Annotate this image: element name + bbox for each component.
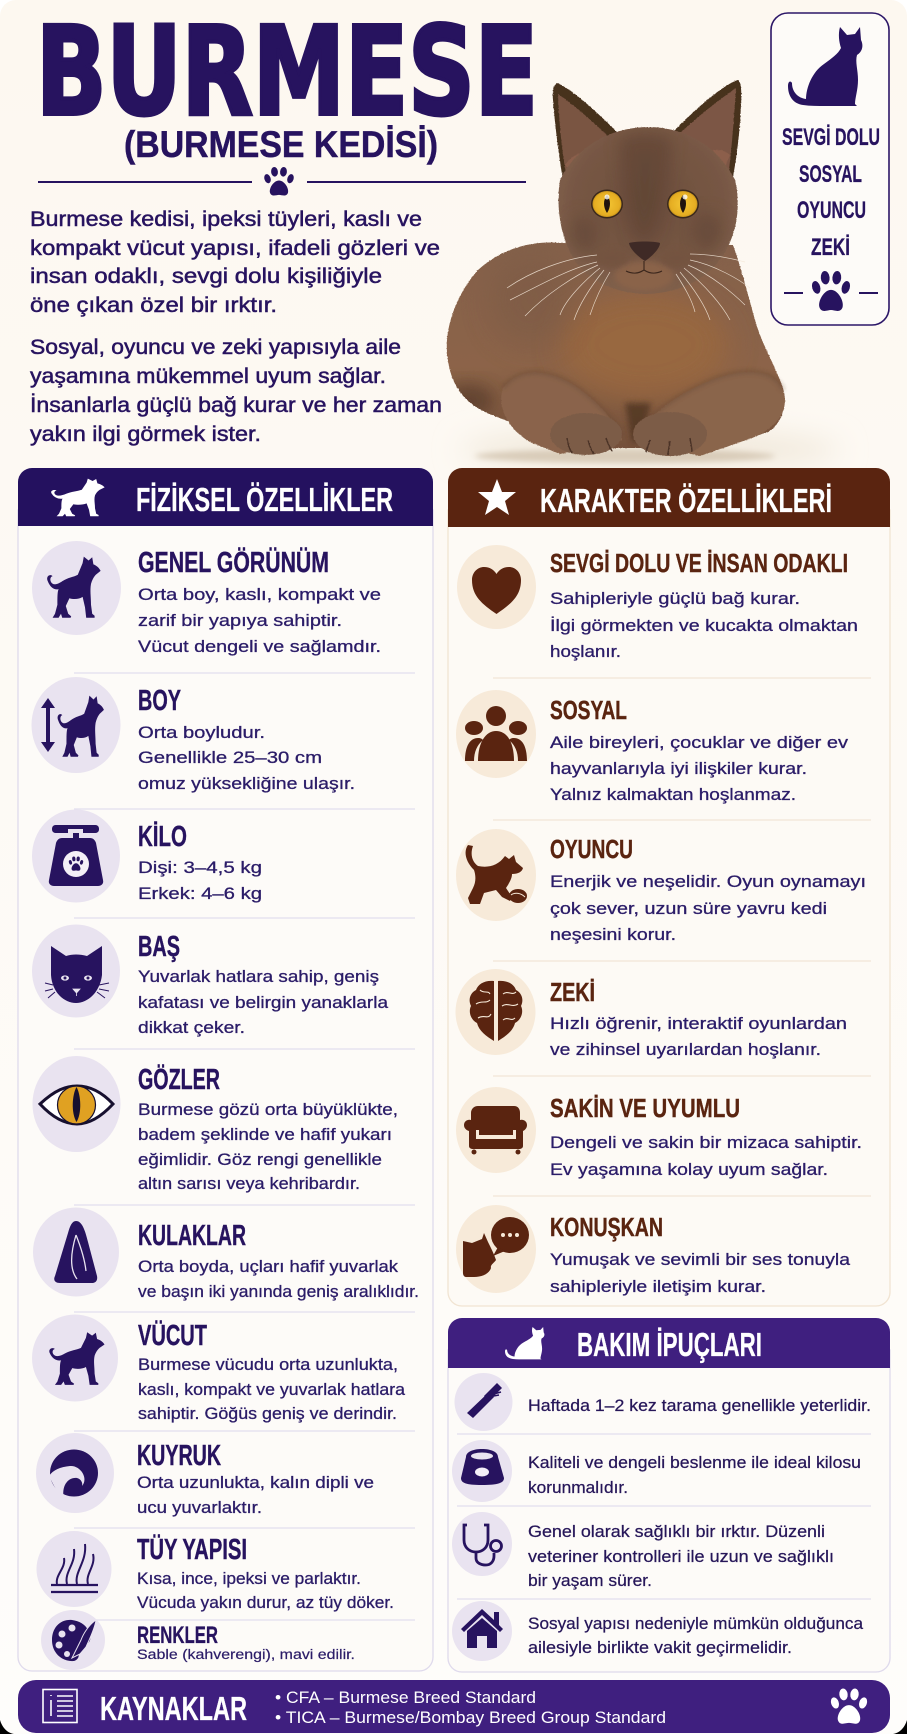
footer: sources: KAYNAKLAR (100, 1690, 247, 1727)
tip: comb (454, 1373, 871, 1431)
item: kuyruk: ucu yuvarlaktır. (137, 1499, 262, 1517)
item: kulaklar (33, 1208, 419, 1301)
item: kilo: KİLO (138, 821, 187, 853)
item: renkler (41, 1610, 355, 1670)
item: konuşkan (456, 1205, 851, 1296)
item: oyuncu: Enerjik ve neşelidir. Oyun oynamayı (550, 873, 866, 891)
footer: sources (18, 1680, 890, 1733)
item: sosyal: hayvanlarıyla iyi ilişkiler kurar. (550, 760, 807, 778)
panel header (448, 1318, 890, 1368)
cat whiskers (507, 254, 750, 320)
item: oyuncu: OYUNCU (550, 834, 633, 864)
tip: stethoscope: veteriner kontrolleri ile uzun ve sağlıklı (528, 1547, 834, 1566)
item: kulaklar: ve başın iki yanında geniş aralıklıdır. (138, 1283, 419, 1301)
intro paragraph 2: Sosyal, oyuncu ve zeki yapısıyla aile (30, 336, 401, 359)
item: tüy yapısı (36, 1531, 394, 1612)
item: sosyal: Aile bireyleri, çocuklar ve diğer ev (550, 734, 849, 752)
cat photo (442, 80, 785, 463)
icon: white cat (51, 479, 105, 516)
intro paragraph 1: öne çıkan özel bir ırktır. (30, 294, 277, 317)
item: oyuncu: neşesini korur. (550, 926, 676, 944)
item: boy: BOY (138, 685, 181, 717)
item: sevgi dolu: İlgi görmekten ve kucakta olmaktan (550, 616, 858, 635)
item: kilo: Dişi: 3–4,5 kg (138, 859, 262, 877)
trait labels (782, 124, 880, 261)
item: gözler: badem şeklinde ve hafif yukarı (138, 1126, 392, 1144)
cat nose and mouth (626, 242, 662, 273)
item: zeki: ve zihinsel uyarılardan hoşlanır. (550, 1041, 821, 1059)
item: sevgi dolu: Sahipleriyle güçlü bağ kurar. (550, 590, 800, 608)
item: tüy yapısı: TÜY YAPISI (137, 1533, 247, 1566)
trait labels: OYUNCU (797, 197, 866, 224)
item: vücut: Burmese vücudu orta uzunlukta, (138, 1356, 398, 1374)
sources list: • TICA – Burmese/Bombay Breed Group Standard (275, 1708, 666, 1727)
tip: house: ailesiyle birlikte vakit geçirmelidir. (528, 1638, 792, 1657)
title: BURMESE (36, 1, 538, 143)
tip: house (452, 1601, 864, 1661)
tip: comb: Haftada 1–2 kez tarama genellikle yeterlidir. (528, 1396, 871, 1415)
icon: sitting cat (788, 27, 862, 106)
intro paragraph 2 (30, 336, 442, 446)
item: sosyal (456, 690, 849, 804)
item: kuyruk: KUYRUK (137, 1440, 221, 1472)
item: vücut: sahiptir. Göğüs geniş ve derindir. (138, 1405, 397, 1423)
item: kuyruk: Orta uzunlukta, kalın dipli ve (137, 1474, 374, 1492)
item: vücut: kaslı, kompakt ve yuvarlak hatlara (138, 1381, 406, 1399)
item: konuşkan: sahipleriyle iletişim kurar. (550, 1278, 766, 1296)
item: sakin ve uyumlu: Dengeli ve sakin bir mizaca sahiptir. (550, 1134, 862, 1152)
item: genel görünüm: Vücut dengeli ve sağlamdır. (138, 638, 381, 656)
item: boy (32, 677, 355, 793)
tip: food bowl: Kaliteli ve dengeli beslenme ile ideal kilosu (528, 1453, 861, 1472)
panel: care tips (448, 1318, 890, 1672)
intro paragraph 1: insan odaklı, sevgi dolu kişiliğiyle (30, 265, 382, 288)
item: konuşkan: KONUŞKAN (550, 1212, 663, 1242)
item: oyuncu (456, 829, 866, 944)
item: boy: Orta boyludur. (138, 724, 265, 742)
panel header (448, 468, 890, 527)
intro paragraph 2: yaşamına mükemmel uyum sağlar. (30, 365, 386, 388)
item: renkler: Sable (kahverengi), mavi edilir. (137, 1647, 355, 1662)
item: baş: BAŞ (138, 931, 180, 963)
item: boy: Genellikle 25–30 cm (138, 749, 322, 767)
item: tüy yapısı: Vücuda yakın durur, az tüy döker. (137, 1594, 394, 1612)
item: kulaklar: Orta boyda, uçları hafif yuvarlak (138, 1258, 399, 1276)
intro paragraph 2: İnsanlarla güçlü bağ kurar ve her zaman (30, 394, 442, 417)
item: kilo (32, 810, 262, 903)
icon: star (478, 479, 516, 515)
item: tüy yapısı: Kısa, ince, ipeksi ve parlaktır. (137, 1570, 361, 1588)
item: vücut (32, 1314, 406, 1423)
item: genel görünüm: zarif bir yapıya sahiptir. (138, 612, 342, 630)
panel header (18, 468, 433, 526)
tip: stethoscope (452, 1512, 834, 1590)
divider with paw (38, 167, 526, 196)
icon: white sitting cat (505, 1327, 544, 1359)
trait labels: ZEKİ (811, 234, 850, 261)
panel: character traits (448, 468, 890, 1306)
item: kuyruk (36, 1433, 374, 1517)
sources list (275, 1688, 666, 1727)
icon: white paw (830, 1688, 868, 1724)
item: konuşkan: Yumuşak ve sevimli bir ses tonuyla (550, 1251, 851, 1269)
item: sakin ve uyumlu: SAKİN VE UYUMLU (550, 1093, 740, 1123)
item: sevgi dolu: hoşlanır. (550, 643, 621, 661)
icon: list (43, 1690, 77, 1722)
item: genel görünüm (32, 541, 381, 656)
item: baş: Yuvarlak hatlara sahip, geniş (138, 968, 379, 986)
item: sakin ve uyumlu: Ev yaşamına kolay uyum sağlar. (550, 1161, 828, 1179)
item: sosyal: SOSYAL (550, 695, 627, 725)
item: zeki: Hızlı öğrenir, interaktif oyunlardan (550, 1015, 847, 1033)
item: sakin ve uyumlu (456, 1087, 862, 1179)
item: gözler: Burmese gözü orta büyüklükte, (138, 1101, 398, 1119)
item: baş: dikkat çeker. (138, 1019, 245, 1037)
item: gözler: altın sarısı veya kehribardır. (138, 1175, 360, 1193)
item: sosyal: Yalnız kalmaktan hoşlanmaz. (550, 786, 796, 804)
item: gözler: GÖZLER (138, 1063, 220, 1096)
sources list: • CFA – Burmese Breed Standard (275, 1688, 536, 1707)
item: renkler: RENKLER (137, 1622, 218, 1649)
item: gözler: eğimlidir. Göz rengi genellikle (138, 1151, 382, 1169)
intro paragraph 2: yakın ilgi görmek ister. (30, 423, 261, 446)
cat eyes (591, 190, 699, 218)
intro paragraph 1 (30, 208, 440, 317)
floor under cat (460, 430, 840, 470)
panel header: BAKIM İPUÇLARI (577, 1326, 762, 1363)
badge panel: traits (771, 13, 889, 325)
item: oyuncu: çok sever, uzun süre yavru kedi (550, 900, 827, 918)
item: boy: omuz yüksekliğine ulaşır. (138, 775, 355, 793)
item: zeki (456, 969, 847, 1059)
tip: food bowl: korunmalıdır. (528, 1478, 628, 1497)
item: zeki: ZEKİ (550, 977, 595, 1007)
icon: paw with dashes (784, 271, 878, 311)
tip: food bowl (452, 1440, 861, 1502)
item: genel görünüm: GENEL GÖRÜNÜM (138, 546, 329, 579)
trait labels: SOSYAL (799, 161, 862, 188)
item: vücut: VÜCUT (138, 1319, 207, 1352)
item: kilo: Erkek: 4–6 kg (138, 885, 262, 903)
intro paragraph 1: Burmese kedisi, ipeksi tüyleri, kaslı ve (30, 208, 422, 231)
tip: stethoscope: bir yaşam sürer. (528, 1571, 652, 1590)
subtitle: (BURMESE KEDİSİ) (124, 124, 438, 165)
tip: stethoscope: Genel olarak sağlıklı bir ırktır. Düzenli (528, 1522, 825, 1541)
item: baş: kafatası ve belirgin yanaklarla (138, 994, 389, 1012)
item: sevgi dolu (457, 545, 858, 661)
intro paragraph 1: kompakt vücut yapısı, ifadeli gözleri ve (30, 237, 440, 260)
panel: physical traits (18, 468, 433, 1671)
item: baş (32, 924, 389, 1037)
item: kulaklar: KULAKLAR (138, 1220, 246, 1252)
item: genel görünüm: Orta boy, kaslı, kompakt ve (138, 586, 381, 604)
tip: house: Sosyal yapısı nedeniyle mümkün olduğunca (528, 1614, 864, 1633)
item: gözler (32, 1056, 398, 1193)
panel header: FİZİKSEL ÖZELLİKLER (136, 481, 393, 518)
